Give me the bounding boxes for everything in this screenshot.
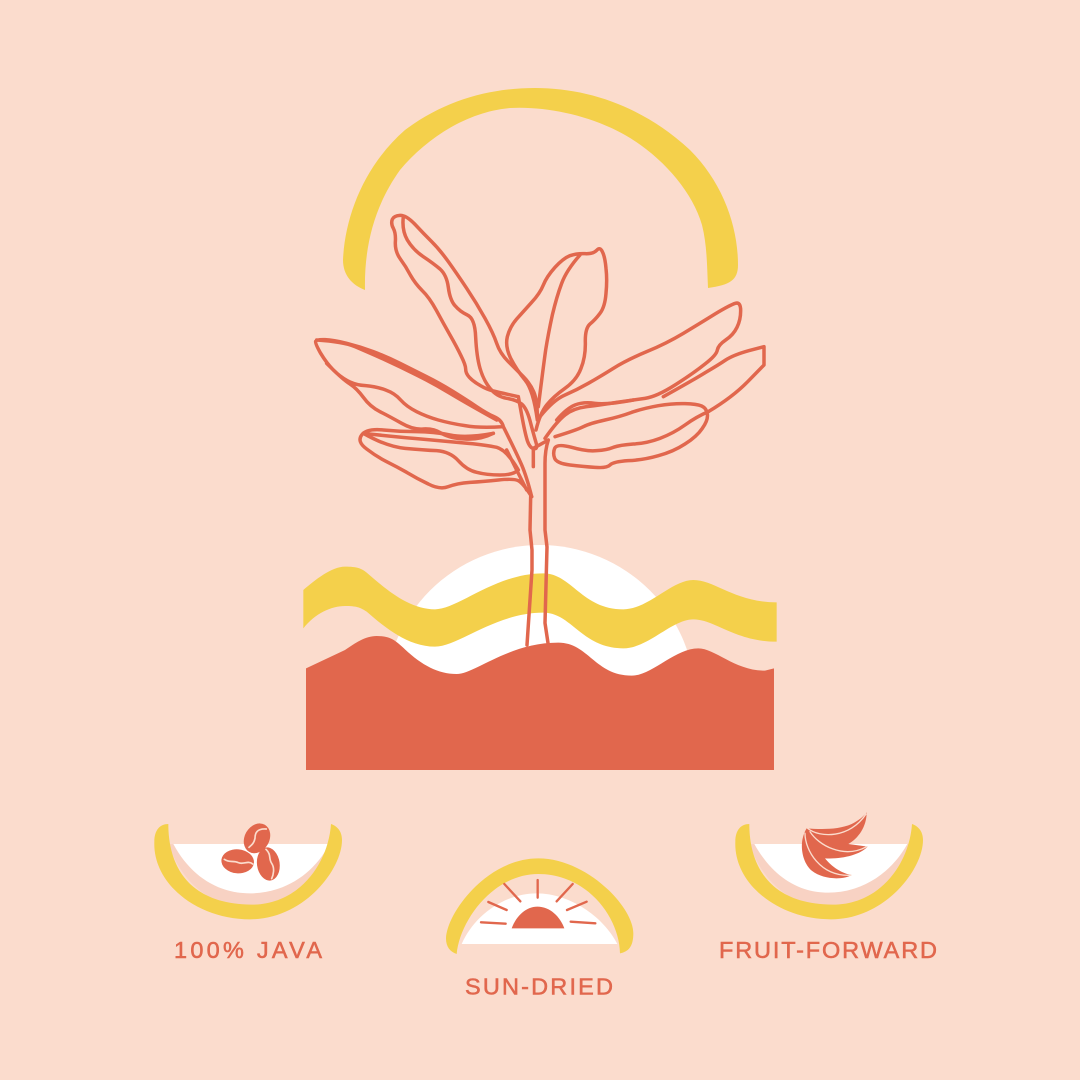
badge: Sun-dried (446, 858, 633, 1000)
far right leaf (663, 347, 764, 412)
white sun disc (396, 545, 687, 676)
label: 100% Java: 100% JAVA (174, 937, 322, 963)
upper right leaf (540, 303, 741, 438)
white bowl (754, 844, 907, 893)
landscape waves (303, 567, 777, 770)
infographic canvas (154, 88, 936, 995)
yellow rim (154, 824, 342, 919)
icon: fruit segments (802, 812, 868, 878)
trunk (527, 440, 548, 645)
pale shadow bowl (750, 844, 911, 908)
center leaf (507, 249, 607, 430)
upper far left leaf (316, 340, 532, 497)
badge: Fruit-forward (719, 812, 937, 963)
yellow wave band (303, 567, 777, 648)
coffee plant line drawing (316, 215, 764, 645)
lower left leaf (360, 430, 532, 497)
lower right leaf (554, 400, 708, 468)
white bowl (173, 844, 329, 893)
label: Sun-dried: SUN-DRIED (465, 974, 613, 1000)
icon: coffee beans (220, 819, 282, 882)
upper left leaf (392, 215, 537, 449)
yellow arch (446, 858, 633, 954)
white dome (462, 893, 617, 944)
badge: 100% Java (154, 819, 342, 963)
pale shadow bowl (169, 844, 332, 908)
yellow rim (735, 824, 923, 919)
icon: sun (481, 880, 595, 928)
yellow sun arch (343, 88, 738, 290)
red hill (306, 636, 774, 770)
label: Fruit-forward: FRUIT-FORWARD (719, 937, 937, 963)
